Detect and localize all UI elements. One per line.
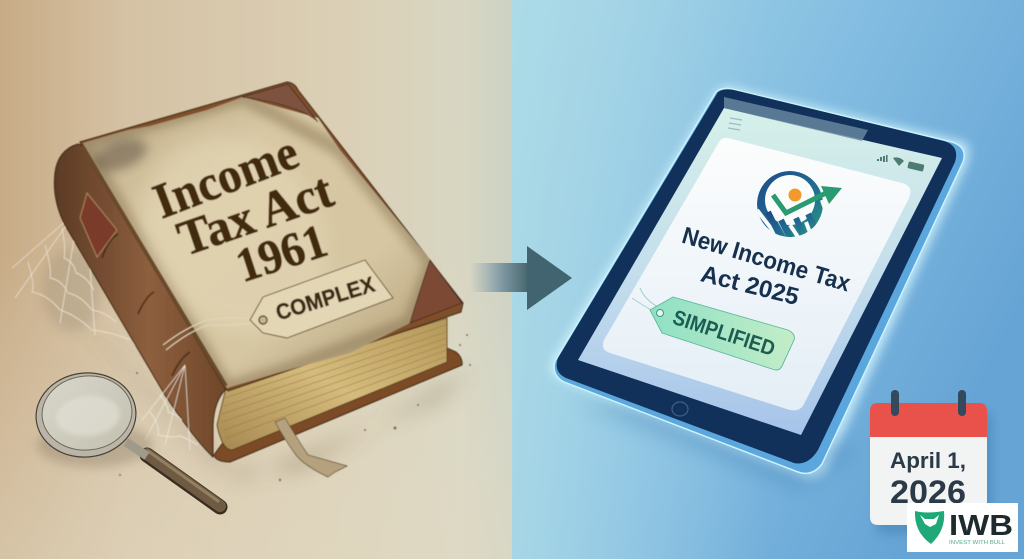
background: left beige panel	[0, 0, 512, 559]
corner leather bottom	[410, 260, 462, 323]
tablet bezel	[557, 89, 956, 463]
tag string	[632, 288, 658, 312]
corner leather top	[242, 84, 318, 122]
complex tag	[250, 260, 393, 338]
calendar binding rings	[895, 394, 962, 412]
page lines	[222, 325, 448, 438]
magnifier shadow	[37, 423, 153, 467]
title: Income Tax Act 1961: 1961	[230, 214, 333, 293]
old book illustration	[12, 82, 471, 481]
bottom back cover	[214, 345, 462, 462]
aged parchment cover	[83, 97, 462, 388]
magnifier handle	[126, 442, 220, 507]
menu icon	[728, 118, 742, 130]
heading: New Income Tax Act 2025: New Income Tax	[679, 222, 854, 298]
transition arrow	[470, 246, 572, 310]
dust specks	[119, 334, 471, 481]
IWB logo badge	[907, 503, 1018, 552]
tablet shadow	[580, 400, 860, 490]
complex tag: COMPLEX	[273, 272, 378, 325]
title: Income Tax Act 1961: Income	[146, 123, 306, 229]
logo	[757, 171, 842, 240]
cover edge under	[80, 82, 463, 391]
content card	[603, 138, 910, 410]
simplified tag	[650, 297, 794, 370]
background: right blue panel	[512, 0, 1024, 559]
cobweb behind spine	[12, 213, 135, 345]
title: Income Tax Act 1961	[146, 123, 340, 293]
simplified tag: SIMPLIFIED	[670, 306, 778, 361]
tablet glow	[551, 86, 969, 478]
magnifying glass	[32, 368, 220, 507]
date text: 2026	[890, 474, 966, 510]
title: Income Tax Act 1961: Tax Act	[170, 162, 340, 267]
calendar	[870, 394, 992, 534]
calendar page	[870, 437, 987, 525]
screen	[578, 108, 942, 435]
magnifier lens	[38, 371, 136, 455]
spine	[54, 144, 227, 457]
IWB wordmark: IWB	[949, 510, 1013, 542]
page block	[217, 318, 447, 450]
calendar header	[870, 403, 987, 437]
tag string	[163, 318, 262, 350]
tagline: INVEST WITH BULL	[949, 540, 1005, 546]
heading: New Income Tax Act 2025: Act 2025	[698, 261, 802, 311]
top bezel reflection	[724, 97, 868, 141]
status icons	[877, 155, 924, 172]
date text: April 1,	[890, 448, 966, 473]
tablet	[551, 86, 969, 490]
bookmark ribbon	[275, 418, 347, 477]
cover spine groove	[82, 146, 226, 386]
spine label	[80, 193, 117, 257]
spine ribs	[102, 234, 190, 376]
cover edge darkening	[83, 97, 432, 388]
magnifier rim	[32, 368, 140, 462]
bull shield icon	[915, 511, 944, 544]
cobweb at spine base	[142, 365, 198, 450]
calendar shadow	[876, 412, 992, 534]
date text	[890, 448, 966, 510]
book shadow	[60, 300, 470, 480]
home button	[672, 402, 688, 416]
tablet body outer	[554, 88, 964, 473]
